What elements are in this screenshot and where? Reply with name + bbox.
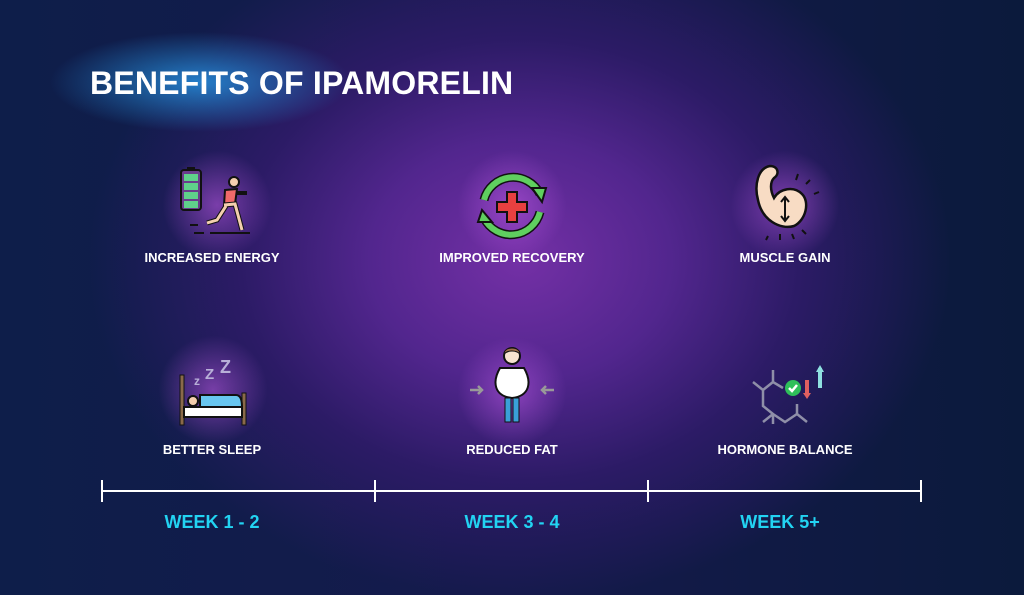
week label 1-2: WEEK 1 - 2 xyxy=(164,512,260,532)
icon: molecule with arrows xyxy=(752,365,824,424)
label: hormone balance: HORMONE BALANCE xyxy=(717,442,853,457)
label: muscle gain: MUSCLE GAIN xyxy=(740,250,830,265)
week label 3-4: WEEK 3 - 4 xyxy=(464,512,560,532)
benefit: muscle gain xyxy=(736,156,834,254)
icon: battery and runner xyxy=(180,167,250,234)
benefit: improved recovery xyxy=(466,158,558,249)
title: BENEFITS OF IPAMORELIN xyxy=(90,65,513,101)
benefit: reduced fat xyxy=(464,346,560,440)
label: improved recovery: IMPROVED RECOVERY xyxy=(439,250,585,265)
icon: body with arrows xyxy=(470,347,554,422)
label: reduced fat: REDUCED FAT xyxy=(466,442,558,457)
icon: bed with zzz: z xyxy=(194,374,200,388)
benefit: better sleep xyxy=(164,341,262,440)
label: increased energy: INCREASED ENERGY xyxy=(144,250,280,265)
icon: bed with zzz: Z xyxy=(220,357,231,377)
week label 5+: WEEK 5+ xyxy=(740,512,820,532)
icon: bed with zzz: Z xyxy=(205,366,214,383)
icon: recovery cycle xyxy=(476,172,548,240)
icon: flexed arm xyxy=(755,164,820,240)
benefit: hormone balance xyxy=(752,365,824,424)
icon: bed with zzz xyxy=(180,357,246,426)
label: better sleep: BETTER SLEEP xyxy=(163,442,261,457)
benefit: increased energy xyxy=(168,156,266,254)
